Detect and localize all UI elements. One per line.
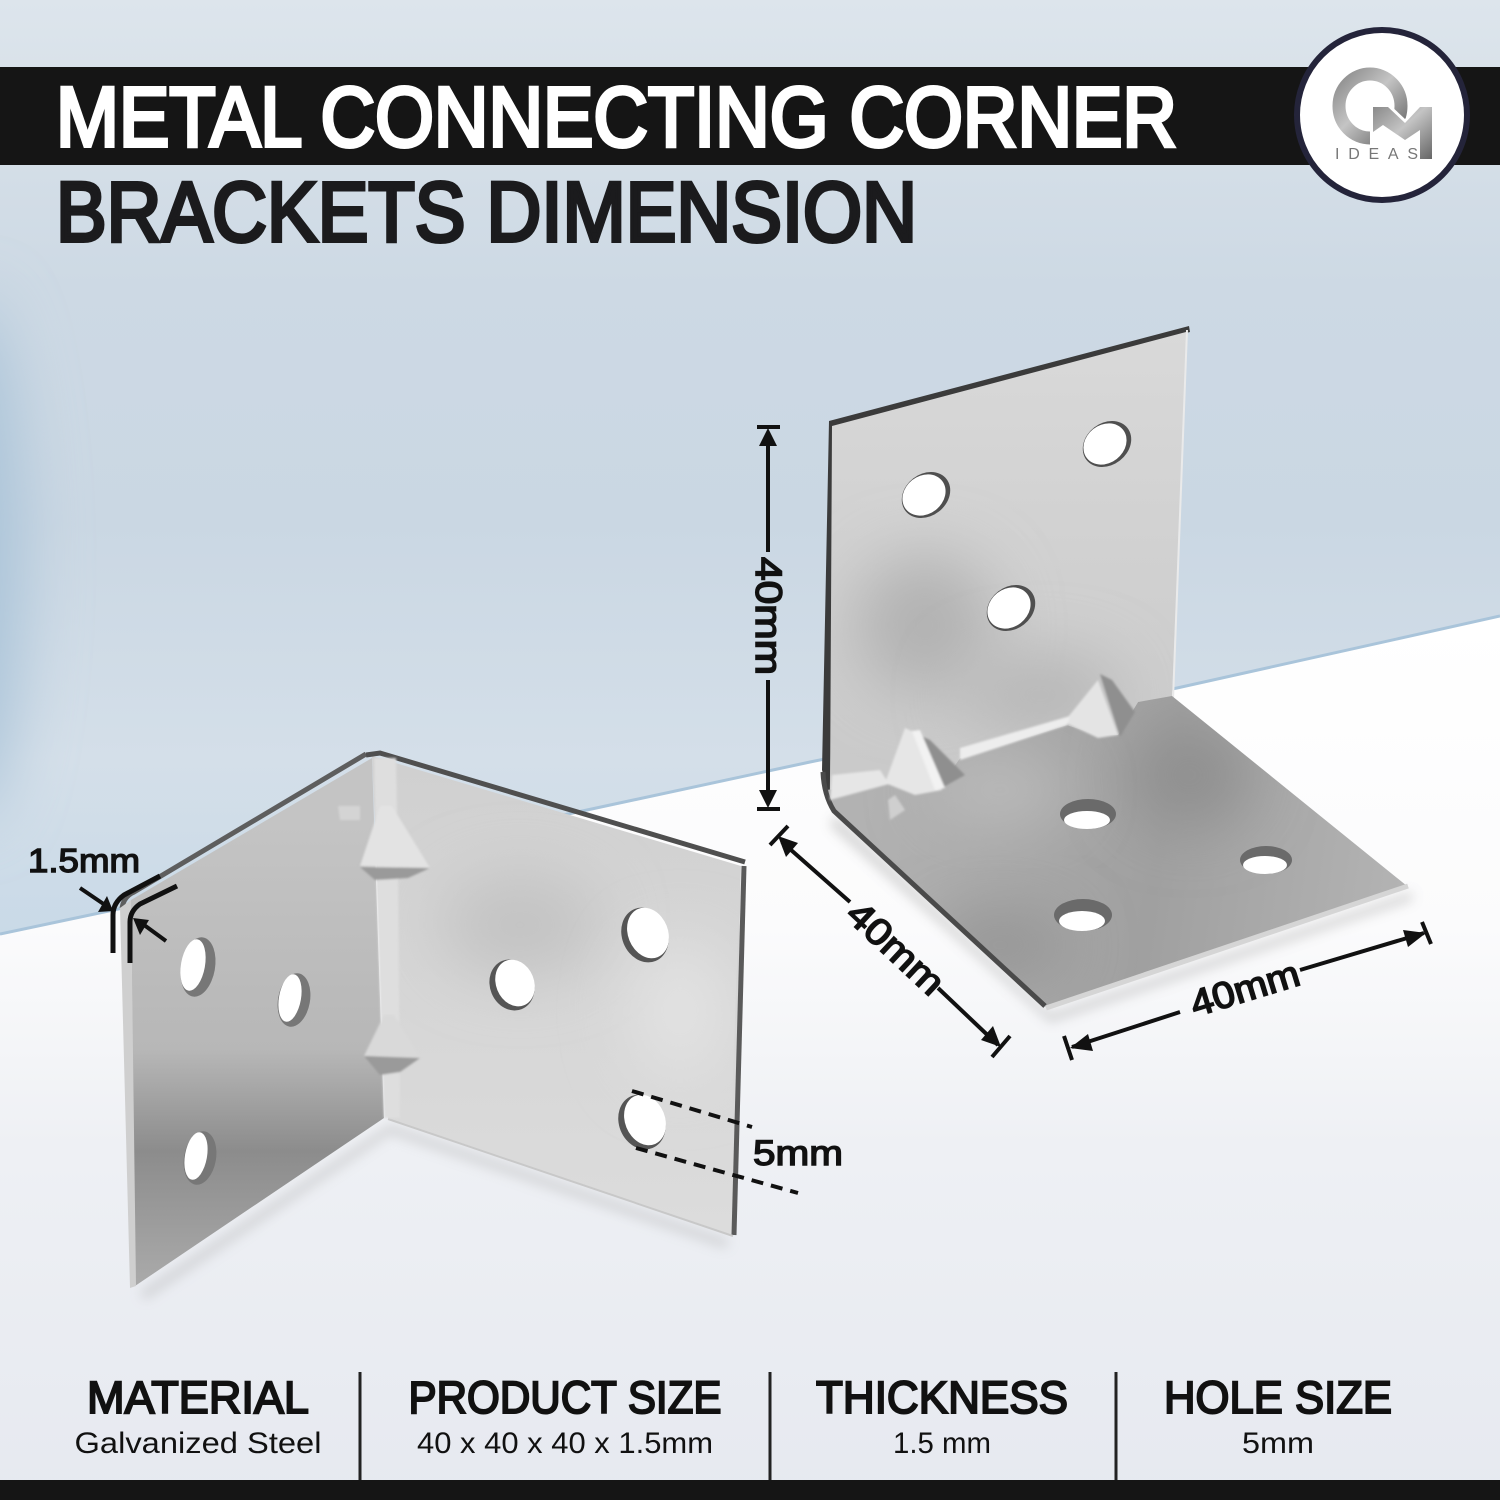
spec: hole size: HOLE SIZE [1164,1372,1392,1423]
spec: thickness: 1.5 mm [893,1427,991,1460]
dimension: 5mm hole [632,1091,843,1193]
left plate [120,754,384,1288]
bracket: lying left [120,753,745,1300]
background: floor [0,617,1500,1500]
logo badge [1297,30,1467,200]
spec: hole size: 5mm [1242,1427,1314,1460]
title line 2: BRACKETS DIMENSION [56,165,917,259]
ribs [830,674,1135,820]
shadow [140,1124,730,1300]
spec: material [74,1372,322,1460]
logo mark [1335,74,1436,163]
background: wall [0,0,1500,950]
dimension: 40mm diagonal [770,826,1010,1057]
dimension: 1.5mm thickness: 1.5mm [28,842,140,879]
vertical plate [822,326,1190,800]
header band [0,67,1500,165]
shadow [830,815,1412,1022]
dimension: 40mm diagonal: 40mm [839,893,953,1003]
bracket: upright right [822,326,1412,1022]
spec: product size [408,1372,722,1460]
dimension: 40mm base [1064,922,1431,1060]
logo mark: IDEAS [1335,146,1418,163]
spec: material: Galvanized Steel [74,1427,322,1460]
spec: material: MATERIAL [87,1372,309,1423]
base plate [823,696,1408,1008]
title line 1: METAL CONNECTING CORNER [56,70,1177,164]
holes [893,411,1292,931]
dimension: 5mm hole: 5mm [753,1134,843,1173]
dimension: 40mm base: 40mm [1185,953,1304,1025]
dimension: 1.5mm thickness [28,842,177,963]
spec: hole size [1164,1372,1392,1460]
ribs [338,758,430,1118]
spec: thickness: THICKNESS [816,1372,1068,1423]
dimension: 40mm vertical: 40mm [748,557,789,675]
spec: product size: PRODUCT SIZE [408,1372,722,1423]
footer band [0,1480,1500,1500]
spec: thickness [816,1372,1068,1460]
dimension: 40mm vertical [748,427,789,809]
spec: product size: 40 x 40 x 40 x 1.5mm [417,1427,713,1460]
right plate [366,753,745,1236]
holes [176,900,677,1187]
